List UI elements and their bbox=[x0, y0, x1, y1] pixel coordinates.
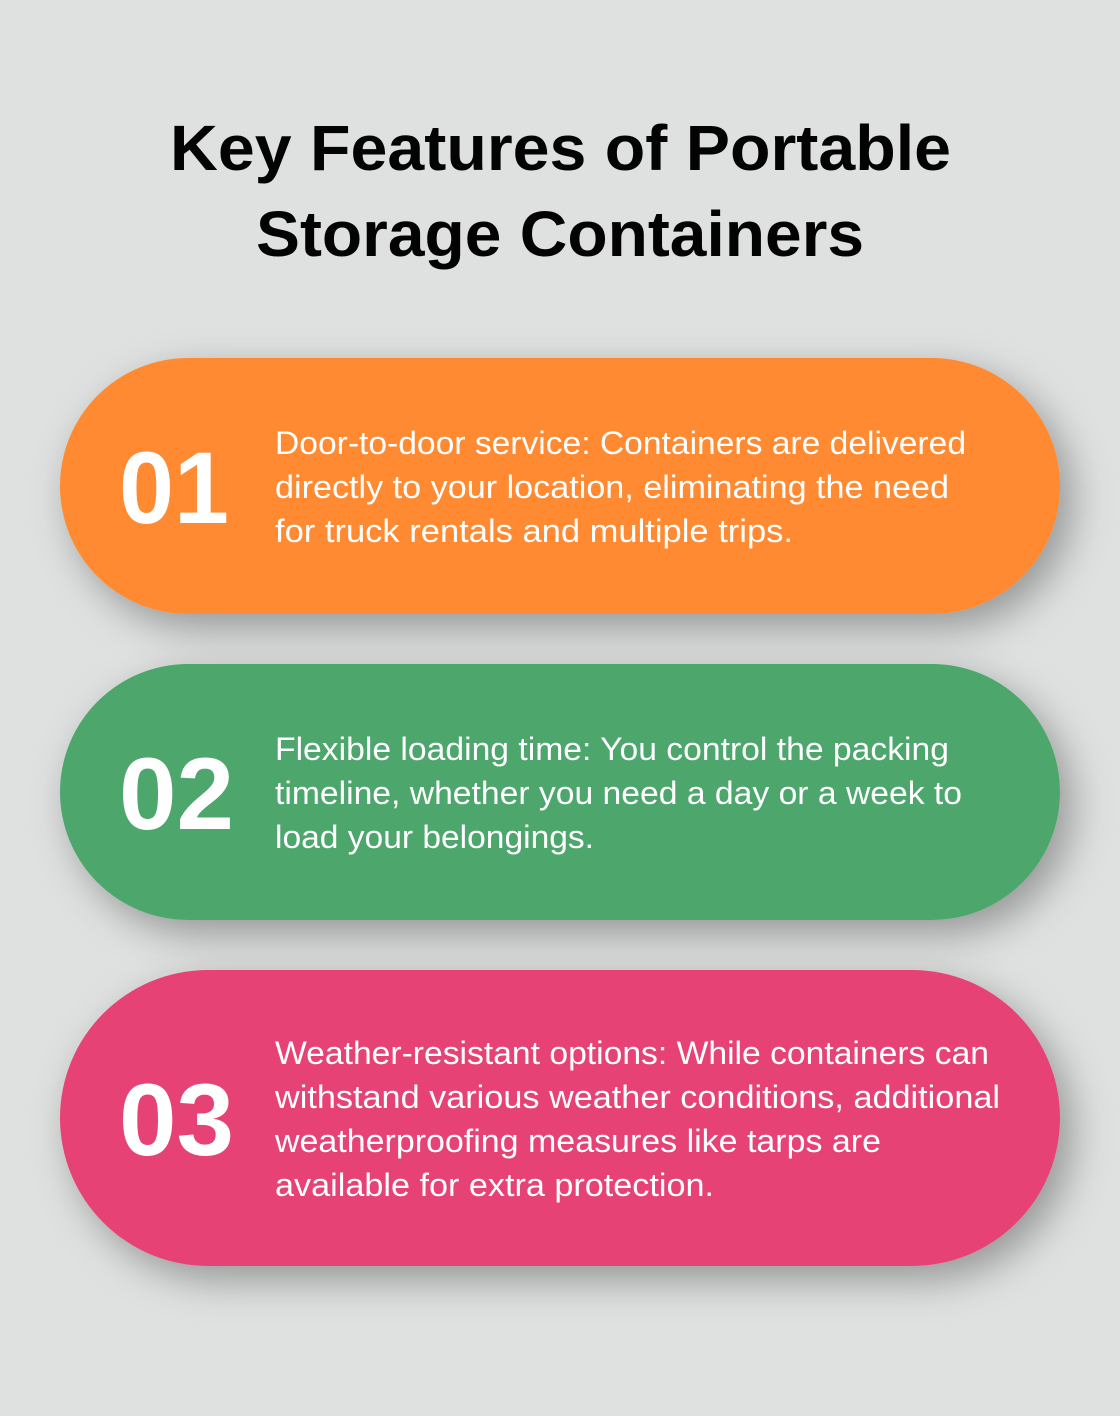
title: Storage Containers bbox=[256, 198, 864, 270]
panel: feature 01 door-to-door service bbox=[60, 358, 1060, 614]
title: Key Features of Portable bbox=[170, 112, 951, 184]
description 02 bbox=[275, 731, 962, 855]
number 01: 01 bbox=[119, 431, 229, 545]
title bbox=[170, 112, 951, 270]
description 01: Door-to-door service: Containers are delivered bbox=[275, 425, 966, 461]
description 01: for truck rentals and multiple trips. bbox=[275, 513, 793, 549]
pink pill background bbox=[60, 970, 1060, 1266]
description 01: directly to your location, eliminating the need bbox=[275, 469, 949, 505]
description 01 bbox=[275, 425, 966, 549]
description 02: Flexible loading time: You control the packing bbox=[275, 731, 949, 767]
description 03: withstand various weather conditions, additional bbox=[274, 1079, 1000, 1115]
description 02: timeline, whether you need a day or a week to bbox=[275, 775, 962, 811]
description 03: available for extra protection. bbox=[275, 1167, 714, 1203]
number 03: 03 bbox=[119, 1063, 234, 1177]
green pill background bbox=[60, 664, 1060, 920]
description 03 bbox=[274, 1035, 1000, 1203]
number 02: 02 bbox=[119, 737, 234, 851]
orange pill background bbox=[60, 358, 1060, 614]
description 03: Weather-resistant options: While containers can bbox=[275, 1035, 989, 1071]
description 02: load your belongings. bbox=[275, 819, 594, 855]
panel: feature 02 flexible loading time bbox=[60, 664, 1060, 920]
panel: feature 03 weather-resistant options bbox=[60, 970, 1060, 1266]
description 03: weatherproofing measures like tarps are bbox=[274, 1123, 881, 1159]
